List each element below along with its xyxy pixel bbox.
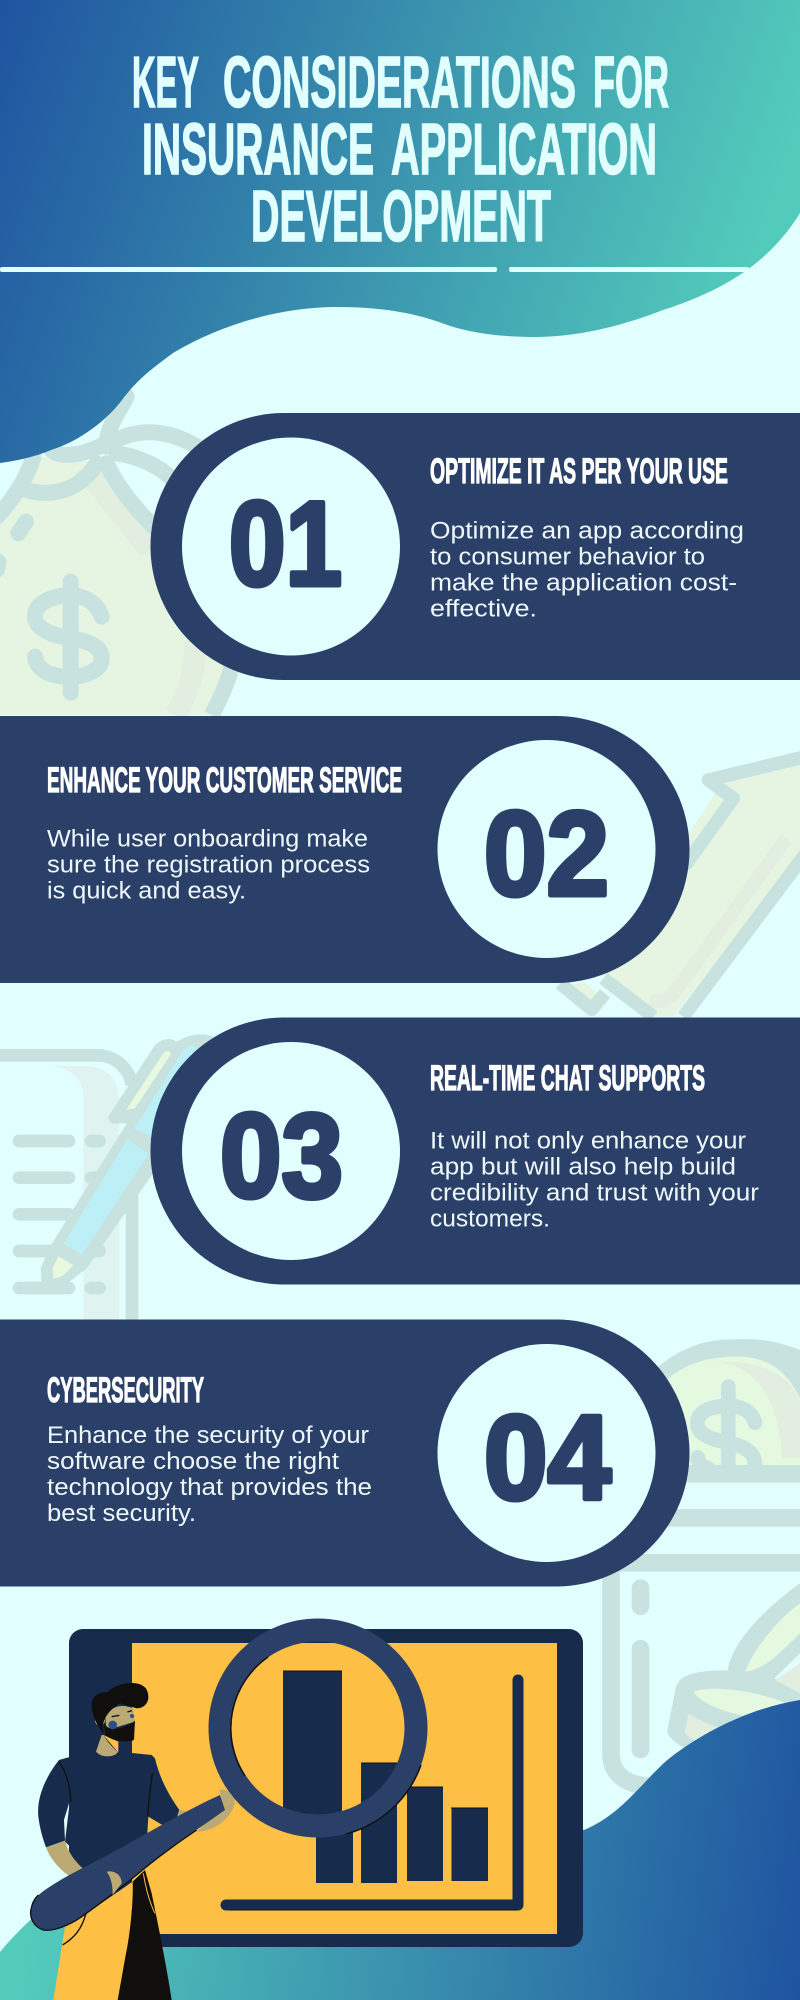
background icon: coins and plant pot: [611, 1339, 800, 1787]
panel: step 02: [0, 716, 690, 983]
text 02: [47, 826, 370, 904]
text 03: customers.: [430, 1206, 550, 1232]
background icon: note and pen: [0, 1034, 213, 1320]
title divider: [0, 267, 749, 272]
number 02: 02: [484, 787, 609, 921]
head with hair and beard: [92, 1683, 148, 1741]
panel: step 03: [150, 1018, 800, 1284]
icon: pen: [41, 1034, 213, 1287]
text 03: It will not only enhance your: [430, 1128, 746, 1154]
text 04: software choose the right: [47, 1448, 339, 1475]
text 01: [430, 518, 744, 622]
magnifying glass handle: [31, 1795, 225, 1930]
text 01: Optimize an app according: [430, 518, 744, 544]
text 02: While user onboarding make: [47, 826, 368, 852]
background icon: money bag: [0, 397, 233, 715]
tablet with bar chart: [69, 1629, 583, 1947]
panel: step 04: [0, 1320, 690, 1586]
text 04: technology that provides the: [47, 1474, 372, 1501]
title: FOR: [593, 43, 669, 123]
background icon: rising arrow: [560, 756, 800, 1017]
text 01: make the application cost-: [430, 570, 737, 596]
note lines: [13, 1135, 106, 1294]
text 02: is quick and easy.: [47, 878, 246, 904]
neck: [96, 1735, 118, 1756]
top gradient wave: [0, 0, 800, 463]
number 03: 03: [220, 1089, 343, 1223]
text 01: effective.: [430, 596, 537, 622]
title: DEVELOPMENT: [251, 177, 551, 257]
shirt: [38, 1752, 179, 1868]
text 04: Enhance the security of your: [47, 1422, 369, 1449]
title: KEY: [132, 43, 199, 123]
heading 04: CYBERSECURITY: [47, 1371, 204, 1410]
text 01: to consumer behavior to: [430, 544, 705, 570]
text 03: [430, 1128, 759, 1232]
bottom gradient wave: [0, 1700, 800, 2000]
number 01: 01: [229, 477, 342, 611]
trousers: [53, 1870, 172, 2000]
number 04: 04: [484, 1391, 611, 1525]
arms and hand: [46, 1789, 235, 1877]
text 03: app but will also help build: [430, 1154, 736, 1180]
icon: magnifying glass lens: [220, 1630, 421, 1834]
title: [132, 43, 669, 257]
heading 02: ENHANCE YOUR CUSTOMER SERVICE: [47, 761, 402, 800]
panel: step 01: [150, 413, 800, 680]
text 03: credibility and trust with your: [430, 1180, 759, 1206]
title: INSURANCE: [142, 110, 374, 190]
illustration: man holding magnifying glass: [31, 1683, 235, 2000]
text 04: best security.: [47, 1500, 196, 1527]
bar chart: [226, 1671, 518, 1910]
text 04: [47, 1422, 372, 1527]
text 02: sure the registration process: [47, 852, 370, 878]
